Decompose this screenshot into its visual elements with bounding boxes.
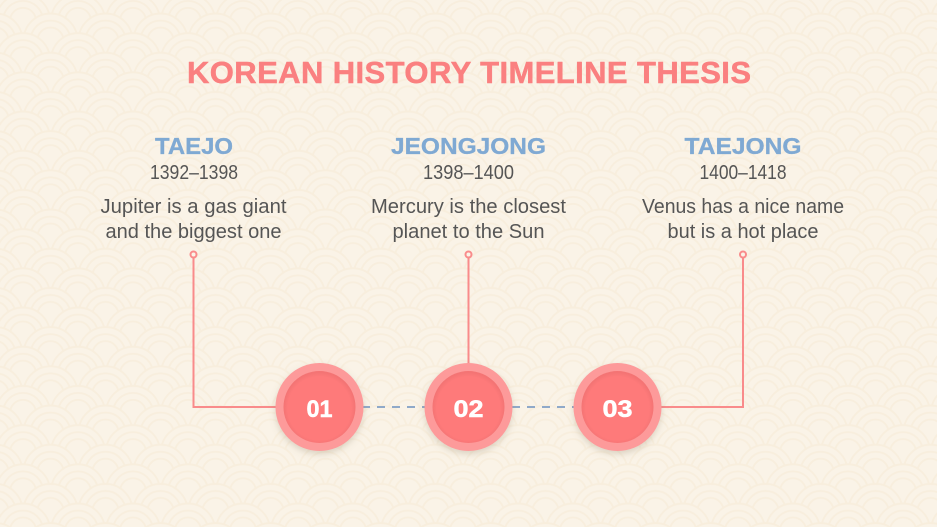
description: Taejo: and the biggest one: [106, 221, 282, 243]
connector line 1: [190, 252, 280, 407]
heading: Taejo: TAEJO: [155, 133, 233, 159]
description: Taejong: Venus has a nice name: [642, 196, 844, 218]
dates: Taejo: 1392–1398: [150, 162, 238, 184]
description: Taejong: [642, 196, 844, 243]
column: Jeongjong: [371, 133, 566, 243]
title: KOREAN HISTORY TIMELINE THESIS: [187, 55, 751, 90]
node 03: [574, 363, 662, 451]
description: Jeongjong: planet to the Sun: [392, 221, 544, 243]
connector line 2: [466, 252, 472, 368]
description: Jeongjong: Mercury is the closest: [371, 196, 566, 218]
heading: Taejong: TAEJONG: [684, 133, 802, 159]
description: Taejo: Jupiter is a gas giant: [100, 196, 287, 218]
node 01: [276, 363, 364, 451]
node 02: [424, 363, 512, 451]
description: Jeongjong: [371, 196, 566, 243]
node 03: 03: [602, 396, 632, 423]
connector line 3: [655, 252, 746, 407]
dates: Taejong: 1400–1418: [700, 162, 786, 184]
node 01: 01: [306, 396, 332, 423]
column: Taejong: [642, 133, 844, 243]
description: Taejong: but is a hot place: [668, 221, 818, 243]
column: Taejo: [100, 133, 287, 243]
description: Taejo: [100, 196, 287, 243]
dates: Jeongjong: 1398–1400: [423, 162, 514, 184]
heading: Jeongjong: JEONGJONG: [391, 133, 546, 159]
node 02: 02: [454, 396, 484, 423]
dashed connector: [362, 406, 575, 408]
